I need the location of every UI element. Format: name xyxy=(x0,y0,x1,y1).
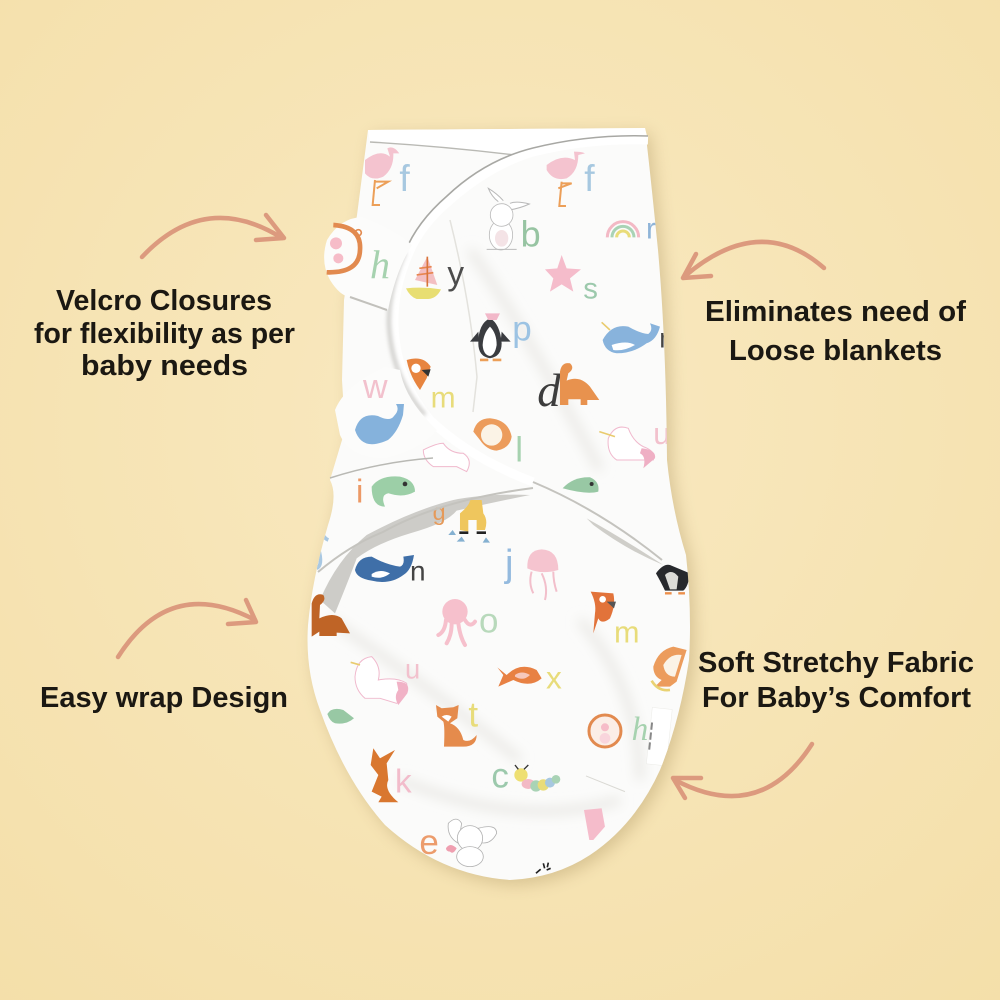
zebra marks xyxy=(536,863,551,873)
fish xyxy=(497,667,542,687)
top hem band xyxy=(368,128,648,155)
fold shadow xyxy=(389,252,425,415)
dinosaur xyxy=(560,363,599,405)
arrow: loose blankets xyxy=(683,242,824,278)
sailboat xyxy=(406,257,441,299)
letter f right: f xyxy=(584,157,595,199)
letter j partial and blue shape at left xyxy=(317,535,329,570)
penguin edge xyxy=(656,565,690,593)
unicorn partial xyxy=(423,443,469,472)
giraffe xyxy=(448,500,490,543)
letter d: d xyxy=(537,365,561,417)
arrow: easy wrap xyxy=(118,600,256,657)
caption: velcro closures: for flexibility as per xyxy=(34,318,295,350)
unicorn lower xyxy=(351,657,408,705)
letter k: k xyxy=(395,764,412,801)
letter f left: f xyxy=(399,157,410,199)
letter j: j xyxy=(504,542,513,585)
octopus xyxy=(438,599,475,645)
wrap lower edge xyxy=(318,482,662,572)
letter e: e xyxy=(419,823,439,862)
inner panel edge xyxy=(450,220,477,412)
hedgehog xyxy=(589,715,621,747)
small seam marks xyxy=(586,776,625,792)
elephant xyxy=(448,819,497,867)
letter m lower: m xyxy=(614,615,640,649)
hedgehog on tab xyxy=(327,225,361,272)
rabbit xyxy=(487,188,529,250)
caption: loose blankets: Eliminates need of xyxy=(705,296,966,328)
letter i: i xyxy=(356,473,363,510)
letter g: g xyxy=(433,499,446,525)
letter p: p xyxy=(512,310,532,349)
fold piping line xyxy=(405,136,648,252)
velcro tab lower xyxy=(335,367,437,458)
sewn label xyxy=(646,707,672,766)
letter o: o xyxy=(479,602,498,641)
tiger xyxy=(436,705,477,747)
letter u: u xyxy=(653,417,670,451)
soft fabric shading xyxy=(330,250,640,811)
jellyfish xyxy=(527,549,558,600)
flamingo left xyxy=(365,147,399,205)
letter n lower: n xyxy=(410,556,426,587)
whale on tab xyxy=(355,404,404,444)
llama xyxy=(584,808,605,840)
caption: velcro closures xyxy=(34,285,295,382)
letter c: c xyxy=(491,756,509,795)
narwhal xyxy=(602,322,660,353)
caterpillar xyxy=(514,765,560,792)
letter m: m xyxy=(431,381,456,414)
letter y: y xyxy=(447,256,464,293)
chameleon lower left xyxy=(327,709,354,724)
penguin xyxy=(470,313,511,360)
letter u lower: u xyxy=(405,654,420,685)
flamingo right xyxy=(547,152,585,206)
shaded opening crescent xyxy=(320,495,663,613)
letter w on tab: w xyxy=(362,368,388,406)
caption: soft fabric: Soft Stretchy Fabric xyxy=(698,647,974,679)
left band seam xyxy=(330,458,433,478)
arrow: soft fabric xyxy=(673,744,812,798)
letter t: t xyxy=(468,696,478,735)
letter b: b xyxy=(521,214,541,255)
top hem seam xyxy=(370,140,647,155)
caption: soft fabric xyxy=(698,647,974,714)
garment body xyxy=(308,128,690,880)
letter x: x xyxy=(546,660,562,696)
velcro tab upper xyxy=(324,217,412,310)
lion edge xyxy=(652,647,687,690)
unicorn upper xyxy=(599,427,655,468)
letter h on band: h xyxy=(370,242,390,287)
caption: velcro closures: baby needs xyxy=(81,350,248,382)
dinosaur edge xyxy=(312,594,350,637)
letter n: n xyxy=(659,322,675,353)
printed pattern: lower xyxy=(312,499,690,873)
letter r: r xyxy=(646,213,656,246)
parrot lower xyxy=(591,592,616,633)
heart xyxy=(446,845,457,853)
letter s: s xyxy=(583,273,598,306)
chameleon right xyxy=(563,477,599,493)
caption: easy wrap: Easy wrap Design xyxy=(40,682,288,714)
caption: soft fabric: For Baby’s Comfort xyxy=(702,682,971,714)
arrow: velcro xyxy=(142,215,284,257)
caption: loose blankets: Loose blankets xyxy=(729,335,942,367)
garment shadow xyxy=(312,133,695,885)
starfish xyxy=(545,255,581,292)
caption: loose blankets xyxy=(705,296,966,367)
parrot xyxy=(407,358,431,390)
letter h lower: h xyxy=(632,711,648,748)
rainbow xyxy=(607,222,639,237)
lion xyxy=(473,418,512,451)
swaddle garment xyxy=(308,128,695,885)
caption: velcro closures: Velcro Closures xyxy=(56,285,272,317)
letter l: l xyxy=(515,431,523,470)
whale dark xyxy=(355,555,414,582)
chameleon left xyxy=(372,476,415,507)
kangaroo xyxy=(371,748,398,802)
printed pattern: upper xyxy=(356,147,675,510)
fold piping edge xyxy=(394,140,648,482)
